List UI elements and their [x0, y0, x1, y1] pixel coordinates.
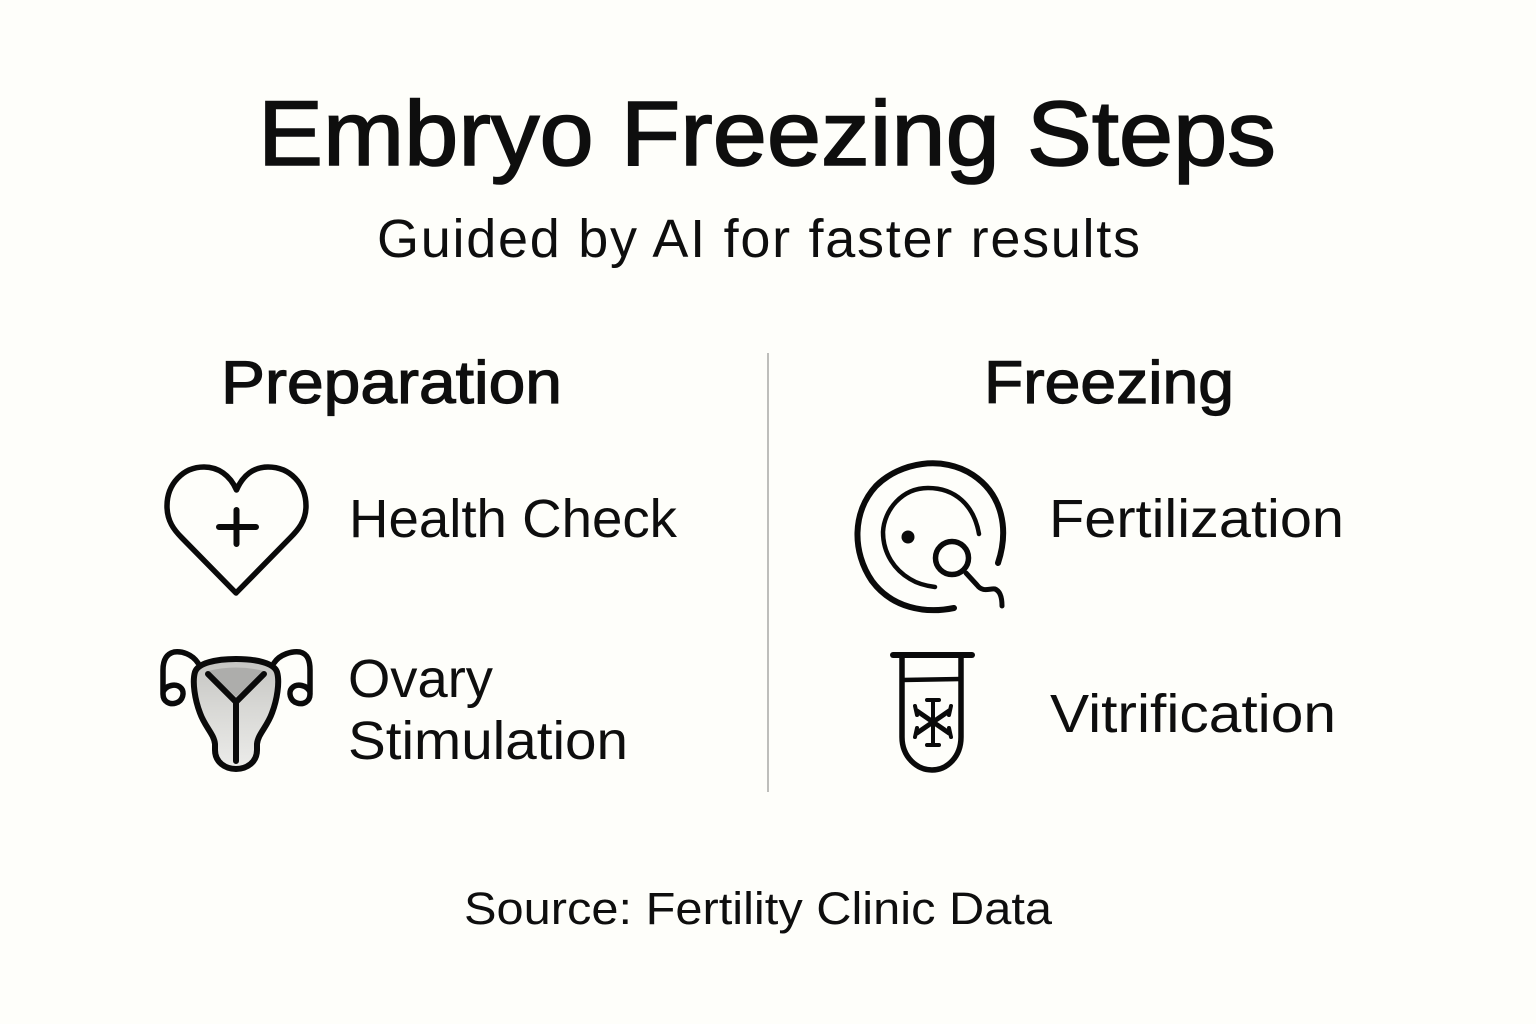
- heading: preparation: Preparation: [221, 349, 562, 416]
- title: Embryo Freezing Steps: [258, 83, 1276, 185]
- icon: heart with plus: [167, 467, 306, 593]
- label: ovary stimulation: Stimulation: [348, 711, 628, 771]
- label: fertilization: Fertilization: [1049, 489, 1344, 549]
- panel: freezing: [857, 349, 1344, 770]
- subtitle: Guided by AI for faster results: [377, 209, 1140, 269]
- icon: test tube with snowflake: [893, 655, 972, 770]
- source note: Source: Fertility Clinic Data: [464, 883, 1053, 934]
- label: vitrification: Vitrification: [1050, 684, 1336, 744]
- icon: uterus and ovaries: [163, 652, 310, 769]
- label: ovary stimulation: Ovary: [348, 649, 493, 709]
- icon: fertilization: [857, 463, 1003, 610]
- label: ovary stimulation: [348, 649, 628, 771]
- label: health check: Health Check: [349, 489, 678, 549]
- center divider: [767, 353, 769, 792]
- panel: preparation: [163, 349, 678, 771]
- heading: freezing: Freezing: [984, 349, 1234, 416]
